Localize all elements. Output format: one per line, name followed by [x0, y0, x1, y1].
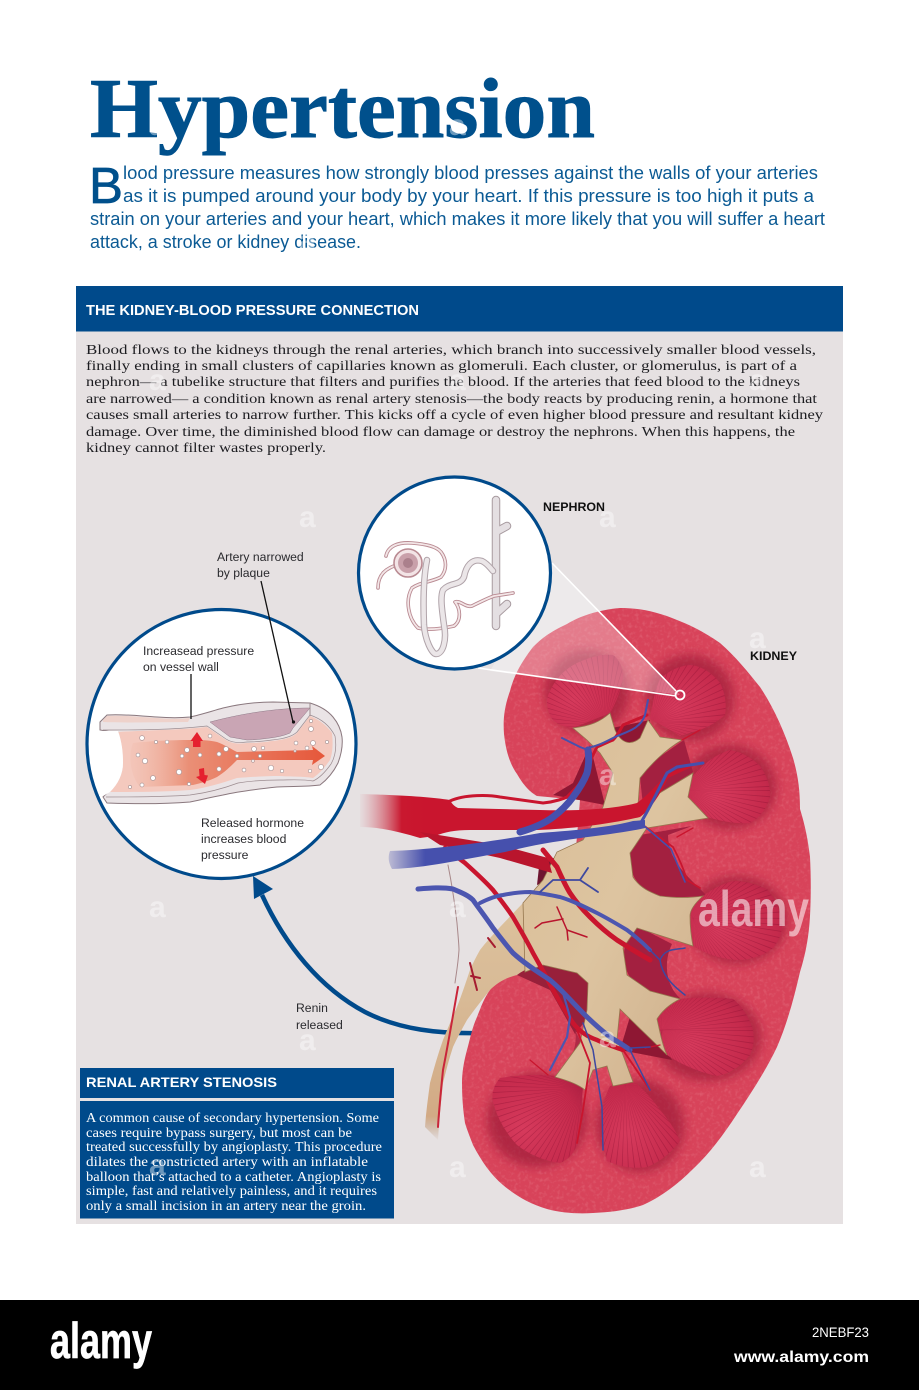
label: renin released: released [296, 1018, 343, 1032]
diagram: narrowed artery [99, 674, 342, 804]
renal artery [360, 715, 700, 1143]
ureter [425, 903, 540, 1140]
label: renin released: Renin [296, 1001, 328, 1015]
renal pyramid: mid right [690, 881, 782, 960]
vessel wall [100, 702, 342, 804]
renal pyramid: lower right [658, 998, 754, 1076]
blood cells [128, 719, 329, 789]
lumen [110, 716, 333, 792]
watermarks: a [749, 622, 766, 655]
watermarks: a [599, 759, 616, 792]
blood flow arrow [130, 740, 325, 787]
callout: nephron circle [358, 477, 550, 669]
panel: renal artery stenosis: A common cause of secondary hypertension. Some [86, 1110, 379, 1125]
watermarks: a [749, 1151, 766, 1184]
website: www.alamy.com [733, 1349, 869, 1366]
inner wall lines [103, 715, 336, 797]
watermarks: a [299, 1024, 316, 1057]
label: nephron: NEPHRON [543, 502, 605, 514]
label: released hormone: increases blood [201, 832, 286, 846]
watermarks: a [299, 501, 316, 534]
watermarks: a [449, 109, 466, 142]
section header bar [76, 286, 843, 332]
watermarks: a [599, 1021, 616, 1054]
watermarks: a [149, 1149, 166, 1182]
label: artery narrowed: by plaque [217, 566, 270, 580]
panel: renal artery stenosis: cases require bypass surgery, but most can be [86, 1125, 352, 1140]
kidney cortex [462, 608, 811, 1213]
pressure arrows [190, 732, 203, 747]
cone linking kidney to nephron [478, 563, 684, 700]
intro paragraph: as it is pumped around your body by your heart. If this pressure is too high it puts a [123, 185, 815, 206]
footer logo: alamy [50, 1313, 152, 1369]
footer bar [0, 1300, 919, 1390]
leader: vessel wall [190, 674, 192, 719]
watermarks: a [449, 891, 466, 924]
watermarks: alamy [698, 881, 809, 937]
panel: renal artery stenosis: treated successfully by angioplasty. This procedure [86, 1139, 382, 1154]
body text: finally ending in small clusters of capillaries known as glomeruli. Each cluster, or glomerulus, is part of a [86, 358, 797, 373]
cortex texture [455, 600, 815, 1220]
body text [86, 342, 823, 455]
intro paragraph: lood pressure measures how strongly blood presses against the walls of your arteries [123, 162, 818, 183]
body text: causes small arteries to narrow further. This kicks off a cycle of even higher blood pressure and resultant kidney [86, 407, 823, 422]
body text: nephron— a tubelike structure that filters and purifies the blood. If the arteries that feed blood to the kidneys [86, 374, 800, 389]
panel: renal artery stenosis: balloon that’s attached to a catheter. Angioplasty is [86, 1169, 381, 1184]
label: artery narrowed: Artery narrowed [217, 550, 304, 564]
label: increased pressure: Increasead pressure [143, 644, 254, 658]
renal cavities [517, 720, 707, 1090]
label: increased pressure: on vessel wall [143, 660, 219, 674]
intro paragraph [89, 157, 826, 252]
section header bar: THE KIDNEY-BLOOD PRESSURE CONNECTION [86, 303, 419, 319]
renal pelvis [523, 713, 708, 1090]
renal pyramid: right [688, 750, 770, 823]
panel: kidney blood pressure connection [76, 331, 843, 1224]
watermarks: a [299, 224, 316, 257]
body text: damage. Over time, the diminished blood flow can damage or destroy the nephrons. When this happens, the [86, 424, 795, 439]
renal pyramid: top right [650, 665, 726, 736]
watermarks [149, 109, 809, 1184]
body text: Blood flows to the kidneys through the renal arteries, which branch into successively smaller blood vessels, [86, 342, 816, 357]
intro paragraph: strain on your arteries and your heart, which makes it more likely that you will suffer a heart [90, 208, 826, 229]
kidney illustration [360, 600, 815, 1220]
watermarks: a [599, 501, 616, 534]
arrow: renin released [253, 876, 482, 1033]
panel: renal artery stenosis: only a small incision in an artery near the groin. [86, 1198, 366, 1213]
title: Hypertension [90, 62, 595, 156]
watermarks: a [749, 364, 766, 397]
renal veins [389, 700, 703, 1150]
drop cap: B [89, 157, 123, 214]
renal pyramid: bottom centre [603, 1083, 680, 1168]
body text: kidney cannot filter wastes properly. [86, 440, 326, 455]
icon: nephron [378, 500, 513, 654]
watermarks: a [149, 891, 166, 924]
intro paragraph: attack, a stroke or kidney disease. [90, 231, 361, 252]
watermarks: a [149, 109, 166, 142]
callout: artery narrowing circle [87, 610, 356, 878]
watermarks: a [449, 364, 466, 397]
renal pyramid: bottom left [492, 1075, 583, 1163]
panel: renal artery stenosis: RENAL ARTERY STENOSIS [86, 1074, 277, 1090]
pyramid shadows [487, 650, 787, 1172]
renal pyramid: top left [547, 654, 623, 728]
label: released hormone: pressure [201, 848, 249, 862]
panel: renal artery stenosis: simple, fast and relatively painless, and it requires [86, 1183, 377, 1198]
watermarks: a [149, 364, 166, 397]
label: kidney: KIDNEY [750, 651, 797, 663]
leader: artery narrowed by plaque [261, 581, 295, 724]
opening of the vessel [99, 731, 123, 796]
label: released hormone: Released hormone [201, 816, 304, 830]
panel: renal artery stenosis [80, 1068, 394, 1218]
body text: are narrowed— a condition known as renal artery stenosis—the body reacts by producing renin, a hormone that [86, 391, 817, 406]
watermarks: a [449, 1151, 466, 1184]
plaque [210, 708, 310, 740]
panel: renal artery stenosis: dilates the constricted artery with an inflatable [86, 1154, 368, 1169]
image id: 2NEBF23 [812, 1324, 869, 1340]
